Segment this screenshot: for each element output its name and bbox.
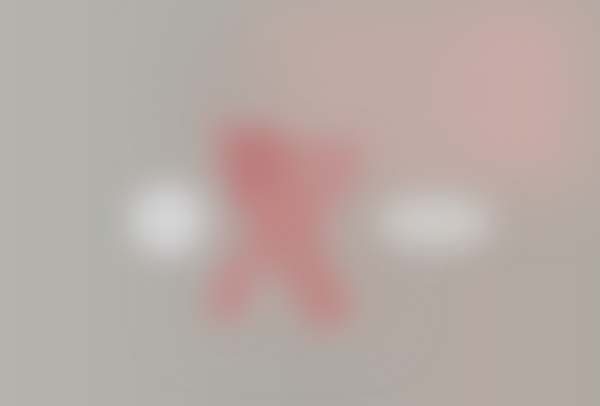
ribbon: dark core (225, 129, 285, 201)
white blobs (130, 184, 493, 256)
ribbon (202, 122, 368, 332)
ribbon: lower left tail (214, 266, 250, 314)
ribbon: right loop (202, 138, 368, 328)
right white blob (377, 194, 493, 250)
ribbon: left loop (212, 122, 350, 332)
left white blob (130, 184, 206, 256)
ribbon: lower right tail (317, 272, 353, 328)
pink haze top right (170, 0, 600, 330)
